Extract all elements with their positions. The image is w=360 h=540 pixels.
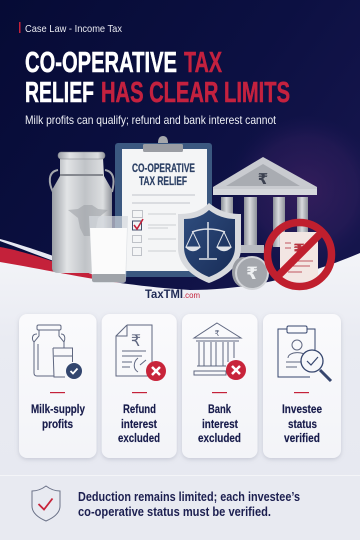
- brand logo: .com: [183, 291, 200, 300]
- clipboard checklist: [132, 195, 195, 256]
- dark header background: [0, 0, 360, 300]
- note text: Deduction remains limited; each investee’s: [78, 490, 300, 504]
- category tag: Case Law - Income Tax: [25, 23, 123, 35]
- cow emblem: [68, 205, 108, 236]
- accent dash: [294, 392, 309, 393]
- illustration: bank building: ₹: [258, 170, 268, 188]
- panel: bank interest excluded: [182, 314, 258, 458]
- note text: [78, 490, 300, 519]
- accent dash: [50, 392, 65, 393]
- card label: interest: [202, 419, 238, 431]
- illustration: milk can: [50, 152, 114, 273]
- icon: shield check: [32, 486, 60, 521]
- card label: profits: [42, 419, 73, 431]
- card label: [198, 404, 241, 445]
- card label: verified: [284, 433, 320, 445]
- panel: refund interest excluded: [102, 314, 177, 458]
- panel: investee status verified: [263, 314, 341, 458]
- illustration: prohibited refund document: [268, 222, 332, 286]
- illustration: shield with scales: [178, 203, 241, 283]
- bottom note band: [0, 475, 360, 540]
- clipboard heading: CO-OPERATIVE: [132, 163, 195, 175]
- icon: milk can with check: [32, 325, 82, 379]
- curved light lower background with red swoosh: [0, 239, 360, 540]
- card label: excluded: [118, 433, 160, 445]
- title: [25, 47, 290, 109]
- card label: excluded: [198, 433, 241, 445]
- card label: status: [288, 419, 317, 431]
- card label: Refund: [123, 404, 156, 416]
- card label: [31, 404, 86, 431]
- title: TAX: [184, 47, 222, 79]
- illustration: clipboard: [115, 136, 212, 277]
- note text: co-operative status must be verified.: [78, 505, 271, 519]
- clipboard heading: [132, 163, 195, 188]
- card label: [282, 404, 322, 445]
- icon: refund document with cross: [116, 325, 166, 381]
- illustration: bank building: [213, 157, 317, 253]
- card label: [118, 404, 160, 445]
- illustration: milk glass: [89, 216, 128, 283]
- panel: milk-supply profits: [19, 314, 96, 458]
- icon: bank with cross: ₹: [214, 329, 220, 338]
- illustration: prohibited refund document: ₹: [293, 241, 305, 261]
- icon: bank with cross: [194, 323, 246, 380]
- title: RELIEF: [25, 77, 94, 109]
- accent dash: [132, 392, 147, 393]
- accent dash: [212, 392, 227, 393]
- card label: interest: [121, 419, 157, 431]
- clipboard heading: TAX RELIEF: [139, 176, 187, 188]
- subtitle: Milk profits can qualify; refund and bank interest cannot: [25, 113, 277, 127]
- illustration: rupee coins: [232, 257, 268, 289]
- icon: refund document with cross: ₹: [131, 331, 141, 350]
- illustration: rupee coins: ₹: [246, 264, 258, 284]
- title: CO-OPERATIVE: [25, 47, 177, 79]
- brand logo: TaxTMI: [145, 289, 183, 301]
- card label: Investee: [282, 404, 322, 416]
- card label: Milk-supply: [31, 404, 86, 416]
- icon: clipboard with magnifier: [278, 326, 331, 381]
- card label: Bank: [208, 404, 231, 416]
